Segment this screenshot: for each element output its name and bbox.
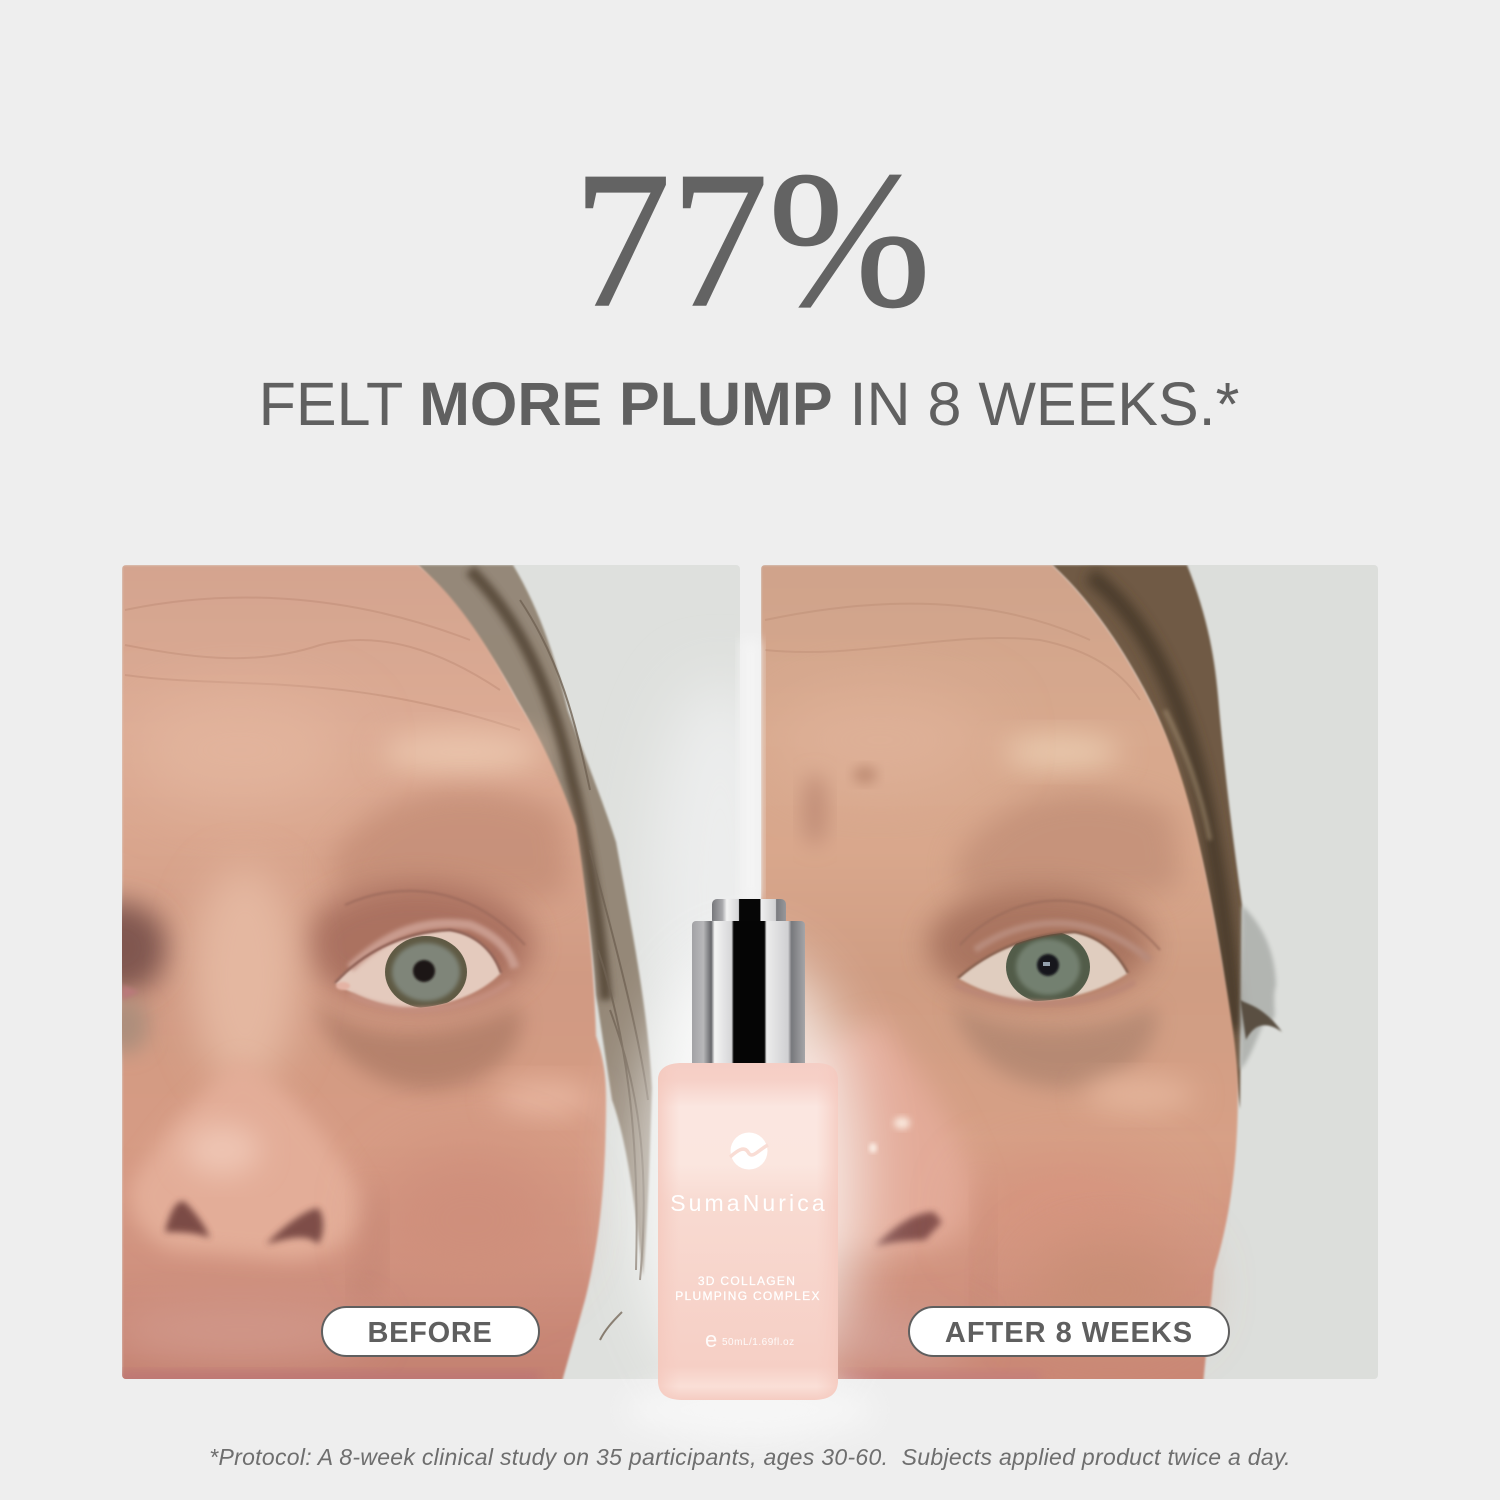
face: before — [122, 565, 608, 1379]
bottle cap — [692, 899, 805, 1067]
bottle logo — [730, 1132, 768, 1170]
headline: FELT MORE PLUMP IN 8 WEEKS.* — [259, 370, 1239, 438]
white divider and glow behind bottle — [625, 640, 875, 1438]
eye socket shadow — [928, 887, 1152, 1003]
left eye socket — [122, 885, 181, 1003]
brow shadow — [955, 792, 1180, 895]
nose — [822, 1024, 975, 1256]
hair: gray tuft — [1240, 905, 1276, 1070]
footnote: *Protocol: A 8-week clinical study on 35 participants, ages 30-60. Subjects applied product twice a day. — [209, 1444, 1291, 1470]
bottle body — [658, 1063, 838, 1400]
brow shadow — [330, 790, 568, 900]
label: before: BEFORE — [367, 1317, 493, 1349]
bottle product name: PLUMPING COMPLEX — [675, 1289, 821, 1303]
bottle brand name: SumaNurica — [670, 1190, 828, 1216]
face: after — [761, 565, 1238, 1388]
label: after 8 weeks: AFTER 8 WEEKS — [945, 1317, 1193, 1349]
panel: after photo — [761, 565, 1378, 1388]
before and after photo panels with product bottle — [122, 565, 1378, 1400]
forehead wrinkles — [125, 598, 520, 730]
under-eye crescent — [950, 1000, 1157, 1088]
bottle product name: 3D COLLAGEN — [698, 1274, 796, 1288]
eye socket shadow — [303, 883, 533, 1007]
bottle volume: 50mL/1.69fl.oz — [722, 1337, 795, 1348]
nose — [190, 865, 300, 1085]
big statistic: 77% — [573, 132, 931, 348]
eye: after — [955, 901, 1160, 1003]
left nostril — [165, 1201, 210, 1238]
forehead wrinkles — [765, 604, 1140, 700]
label: before — [322, 1307, 539, 1356]
cheek — [975, 1160, 1165, 1260]
nostril — [875, 1212, 942, 1246]
hair: after — [1052, 565, 1282, 1109]
eye: before — [335, 891, 525, 1010]
product bottle — [658, 899, 838, 1400]
hair: before — [418, 565, 652, 1340]
label: after 8 weeks — [909, 1307, 1229, 1356]
bottle product name — [675, 1274, 821, 1303]
cheek — [380, 1150, 560, 1290]
under-eye crescent — [312, 1000, 522, 1090]
panel: before photo — [122, 565, 740, 1379]
bottle volume — [705, 1327, 795, 1352]
right nostril — [266, 1208, 323, 1244]
bottle volume: e — [705, 1327, 717, 1352]
